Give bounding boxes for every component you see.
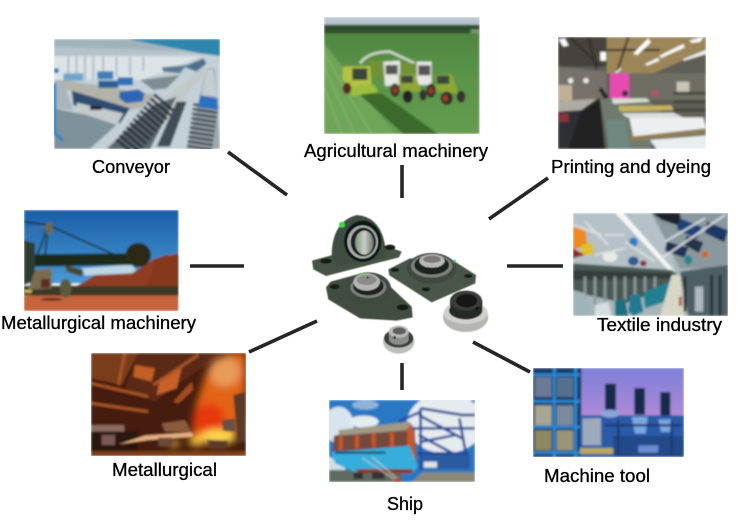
- icon: two-bolt flange bearing: [326, 272, 413, 321]
- photo: printing factory floor: [558, 37, 706, 149]
- panel: metallurgical machinery: [1, 210, 196, 333]
- connector: textile industry: [507, 264, 563, 268]
- central image: bearing units: [312, 215, 488, 354]
- photo: conveyor line: [54, 39, 220, 149]
- connector: ship: [400, 363, 404, 390]
- panel: conveyor: [54, 39, 220, 177]
- panel: agricultural machinery: [304, 17, 488, 161]
- connector: metallurgical: [249, 321, 317, 352]
- label: Textile industry: Textile industry: [597, 315, 722, 335]
- connector: printing and dyeing: [489, 178, 548, 219]
- icon: four-bolt flange bearing: [388, 253, 476, 302]
- label: Machine tool: Machine tool: [544, 466, 650, 486]
- icon: insert bearing large: [443, 291, 488, 332]
- icon: pillow block bearing: [312, 215, 402, 276]
- label: Printing and dyeing: Printing and dyeing: [551, 157, 711, 177]
- connector: agricultural machinery: [400, 165, 404, 198]
- connector: machine tool: [473, 342, 530, 372]
- photo: molten metal furnace: [91, 353, 246, 456]
- photo: bucket wheel excavator: [24, 210, 179, 311]
- connector: conveyor: [228, 152, 287, 195]
- photo: harvesters in a field: [324, 17, 480, 134]
- connector: metallurgical machinery: [190, 264, 244, 268]
- panel: ship: [329, 400, 475, 514]
- panel: machine tool: [533, 368, 684, 486]
- photo: industrial plant towers: [533, 368, 684, 457]
- panel: metallurgical: [91, 353, 246, 480]
- label: Metallurgical machinery: Metallurgical machinery: [1, 313, 196, 333]
- label: Conveyor: Conveyor: [92, 157, 170, 177]
- photo: container ship and cranes: [329, 400, 475, 482]
- label: Agricultural machinery: Agricultural machinery: [304, 141, 488, 161]
- label: Metallurgical: Metallurgical: [112, 460, 217, 480]
- icon: insert bearing small: [383, 326, 414, 354]
- label: Ship: Ship: [387, 494, 423, 514]
- photo: textile machines: [573, 213, 728, 316]
- panel: printing and dyeing: [551, 37, 711, 177]
- panel: textile industry: [573, 213, 728, 335]
